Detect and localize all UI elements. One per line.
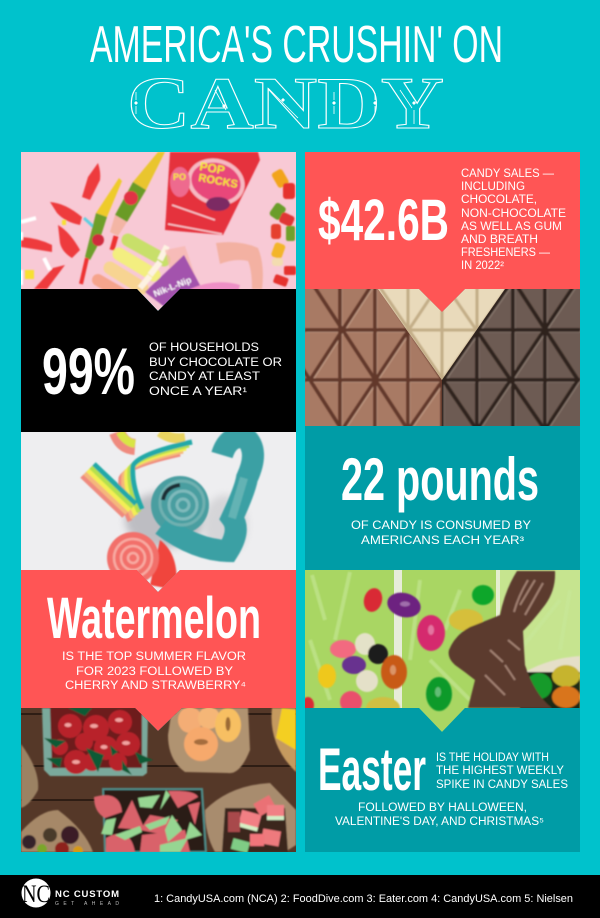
panel: pop rocks candy photo: POP	[198, 159, 226, 177]
icon: tray of red wrapped candy	[42, 708, 153, 776]
title word: Candy: CANDY	[127, 63, 444, 145]
big word: Easter: Easter	[318, 736, 426, 803]
icon: sack of gummy candies	[21, 810, 93, 856]
panel: pop rocks candy photo	[21, 152, 296, 312]
logo: NC Custom: NC CUSTOM	[55, 889, 119, 900]
text: households description: BUY CHOCOLATE OR	[149, 357, 282, 369]
icon: pop rocks packet	[165, 152, 260, 235]
panel: chocolate bunny photo	[302, 570, 580, 735]
text: candy sales description: CANDY SALES —	[461, 168, 554, 180]
panel: pop rocks candy photo: ROCKS	[197, 172, 239, 191]
icon: nik-l-nip pack	[145, 255, 202, 311]
panel: 22 pounds stat	[305, 426, 580, 570]
icon: red sour belt roll	[107, 532, 177, 590]
panel: pop rocks candy photo: PO	[173, 172, 186, 182]
icon: basket of yellow candy	[272, 708, 296, 772]
icon: rainbow sour belt	[82, 432, 192, 521]
text: summer flavor description	[62, 651, 246, 692]
text: candy sales description: INCLUDING	[461, 181, 525, 193]
text: candy sales description	[461, 168, 566, 272]
text: holiday description: SPIKE IN CANDY SALES	[436, 779, 568, 791]
panel: watermelon stat	[21, 570, 296, 731]
panel: sour belts photo	[21, 432, 296, 592]
panel: 99 percent stat	[21, 289, 296, 432]
text: other holidays	[335, 802, 544, 828]
icon: burlap sack of peach rings	[168, 707, 250, 773]
icon: chocolate bunny	[449, 571, 555, 708]
dark chocolate	[442, 289, 580, 426]
big word: Watermelon: Watermelon	[47, 586, 261, 651]
icon: jelly beans	[302, 585, 494, 719]
icon: teal sour belt roll	[151, 437, 253, 551]
icon: sack at left edge	[21, 744, 38, 808]
panel: chocolate bar photo	[305, 289, 580, 426]
title	[90, 16, 503, 145]
text: households description	[149, 342, 282, 398]
big number: 99%: 99%	[42, 334, 135, 408]
text: candy sales description: FRESHENERS —	[461, 247, 550, 259]
text: other holidays: VALENTINE'S DAY, AND CHRISTMAS⁵	[335, 816, 544, 828]
footer bar	[0, 875, 600, 918]
panel: Easter stat	[305, 708, 580, 852]
text: summer flavor description: FOR 2023 FOLLOWED BY	[76, 666, 233, 678]
text: other holidays: FOLLOWED BY HALLOWEEN,	[358, 802, 527, 814]
text: households description: CANDY AT LEAST	[149, 371, 260, 383]
icon: gummy fish and candy strips	[21, 163, 100, 289]
text: candy sales description: IN 2022²	[461, 260, 504, 272]
text: holiday description	[436, 752, 568, 791]
text: holiday description: THE HIGHEST WEEKLY	[436, 765, 564, 777]
text: households description: ONCE A YEAR¹	[149, 386, 247, 398]
icon: tray of sour watermelon slices	[94, 789, 206, 852]
text: candy sales description: AND BREATH	[461, 234, 538, 246]
logo: NC Custom: NC	[22, 881, 50, 908]
text: summer flavor description: IS THE TOP SUMMER FLAVOR	[62, 651, 246, 663]
text: households description: OF HOUSEHOLDS	[149, 342, 259, 354]
text: sources: 1: CandyUSA.com (NCA) 2: FoodDive.com 3: Eater.com 4: CandyUSA.com 5: Nielsen	[154, 893, 573, 905]
white chocolate	[378, 289, 505, 380]
icon: rainbow candy tubes	[96, 178, 122, 217]
icon: egg basket	[520, 656, 580, 712]
text: holiday description: IS THE HOLIDAY WITH	[436, 752, 549, 764]
text: consumption description: AMERICANS EACH YEAR³	[361, 535, 524, 547]
icon: gummy bears	[268, 168, 296, 287]
milk chocolate	[305, 289, 442, 426]
icon: wax bottles	[128, 240, 164, 260]
text: consumption description: OF CANDY IS CONSUMED BY	[351, 520, 531, 532]
big number: $42.6B: $42.6B	[318, 188, 449, 253]
icon: burlap sack of watermelon bites	[205, 783, 296, 853]
text: candy sales description: NON-CHOCOLATE	[461, 208, 566, 220]
text: candy sales description: AS WELL AS GUM	[461, 221, 562, 233]
text: summer flavor description: CHERRY AND STRAWBERRY⁴	[65, 680, 246, 692]
text: candy sales description: CHOCOLATE,	[461, 194, 537, 206]
icon: fruit ribbon	[216, 242, 263, 289]
panel: candy bowls on wood photo	[21, 707, 296, 856]
logo: NC Custom: GET AHEAD	[55, 901, 119, 907]
logo: NC Custom	[22, 878, 119, 908]
text: consumption description	[351, 520, 531, 547]
panel: 42.6B stat	[305, 152, 580, 312]
panel: pop rocks candy photo: Nik-L-Nip	[152, 274, 193, 299]
